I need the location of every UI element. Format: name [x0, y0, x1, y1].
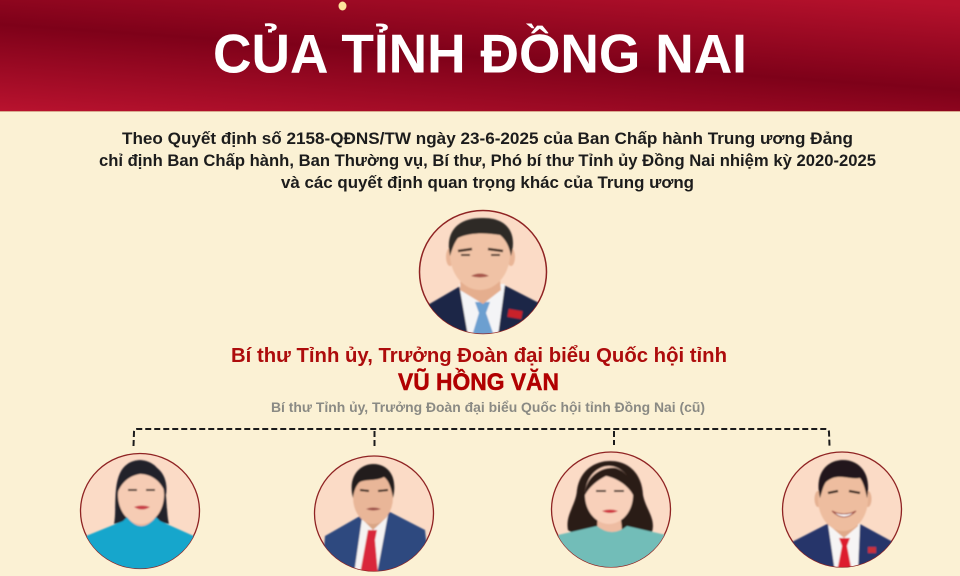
intro text block: chỉ định Ban Chấp hành, Ban Thường vụ, Bí thư, Phó bí thư Tỉnh ủy Đồng Nai nhiệm kỳ 2020-2025: [99, 151, 876, 170]
portrait: Vũ Hồng Văn: [420, 210, 546, 336]
heading: position: Bí thư Tỉnh ủy, Trưởng Đoàn đại biểu Quốc hội tỉnh: [231, 345, 727, 367]
org chart dashed connector: [134, 429, 830, 446]
portrait: deputy 1: [80, 454, 200, 572]
portrait: deputy 4: [782, 452, 902, 572]
intro text block: và các quyết định quan trọng khác của Trung ương: [281, 173, 694, 192]
intro text block: [99, 129, 876, 192]
intro text block: Theo Quyết định số 2158-QĐNS/TW ngày 23-6-2025 của Ban Chấp hành Trung ương Đảng: [122, 129, 853, 148]
icon: gold dot: [338, 2, 346, 10]
former position text: Bí thư Tỉnh ủy, Trưởng Đoàn đại biểu Quốc hội tỉnh Đồng Nai (cũ): [271, 399, 705, 415]
portrait: deputy 2: [314, 456, 434, 574]
title: CỦA TỈNH ĐỒNG NAI: [213, 22, 747, 84]
heading: name: VŨ HỒNG VĂN: [398, 368, 559, 396]
header banner: [0, 0, 960, 112]
portrait: deputy 3: [552, 452, 670, 572]
